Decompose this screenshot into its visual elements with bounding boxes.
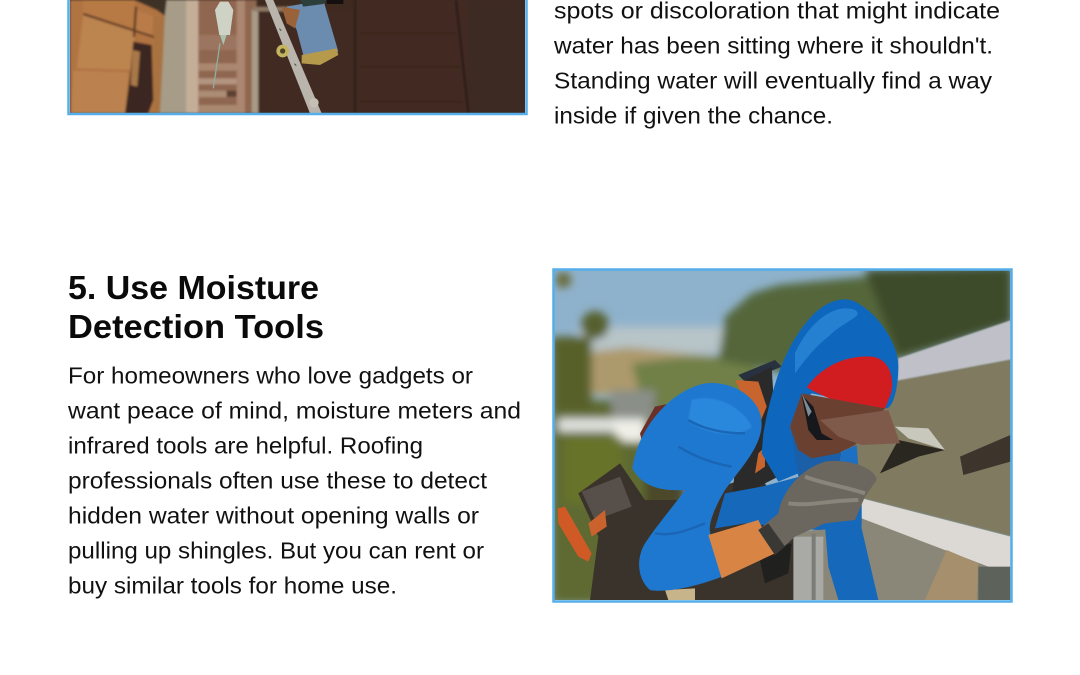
heading: 5. Use Moisture Detection Tools	[68, 269, 324, 345]
paragraph: standing water continuation	[553, 0, 1000, 128]
heading: 5. Use Moisture Detection Tools: Detection Tools	[68, 308, 324, 345]
heading: 5. Use Moisture Detection Tools: 5. Use Moisture	[68, 269, 319, 306]
ladder	[265, 0, 322, 113]
paragraph: standing water continuation: Standing water will eventually find a way	[554, 68, 992, 94]
paragraph: moisture detection tools	[67, 362, 521, 598]
photo: worker on ladder against brown garage door and brick wall	[68, 0, 526, 114]
hood	[762, 299, 898, 482]
fascia and gutter	[788, 517, 1010, 600]
paragraph: standing water continuation: water has been sitting where it shouldn't.	[553, 32, 993, 58]
sleeve arm	[632, 383, 762, 591]
hanging hood front	[825, 526, 878, 600]
neck shadow	[790, 427, 842, 477]
lantern	[215, 2, 233, 35]
forearm	[708, 520, 775, 578]
back and harness	[640, 404, 667, 439]
sky	[554, 270, 1010, 600]
legs	[287, 0, 338, 57]
lifted shingle	[960, 435, 1010, 475]
tool belt and trousers	[578, 463, 793, 600]
photo: roofer in blue hoodie and red cap inspecting roof edge	[552, 267, 1012, 603]
paragraph: moisture detection tools: professionals often use these to detect	[68, 468, 487, 494]
paragraph: moisture detection tools: hidden water without opening walls or	[68, 502, 479, 528]
paragraph: moisture detection tools: For homeowners who love gadgets or	[68, 362, 473, 388]
paragraph: moisture detection tools: pulling up shingles. But you can rent or	[68, 538, 484, 564]
paragraph: standing water continuation: inside if given the chance.	[554, 102, 833, 128]
paragraph: moisture detection tools: want peace of mind, moisture meters and	[67, 398, 521, 424]
face and visor	[790, 393, 885, 458]
paragraph: moisture detection tools: infrared tools are helpful. Roofing	[68, 432, 423, 458]
under-arm torso	[715, 473, 862, 530]
roof surface	[898, 320, 1012, 382]
glove	[758, 461, 877, 555]
red cap	[807, 357, 892, 409]
paragraph: moisture detection tools: buy similar tools for home use.	[68, 572, 397, 598]
